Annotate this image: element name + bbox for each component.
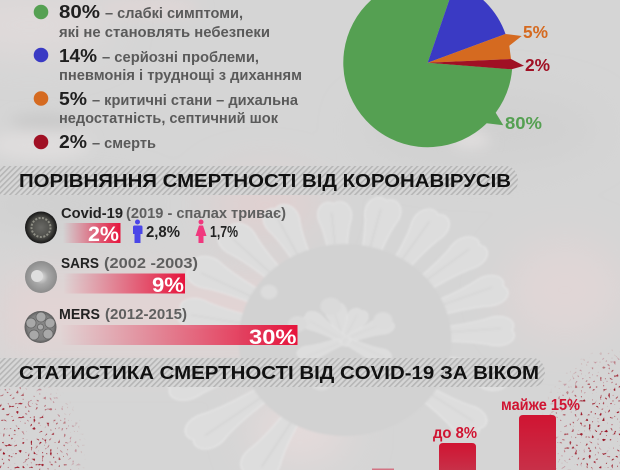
legend item 2%: 2% [59,132,87,152]
legend item 5%: 5% [59,89,87,109]
legend item 5% [34,89,299,127]
name: SARS [61,256,99,272]
legend item 80%: 80% [59,2,100,22]
blood spatter right [535,345,620,470]
legend [34,2,302,152]
bar 30% [60,325,298,349]
heading: age statistics [0,358,545,387]
bar: до 8% [433,425,477,470]
heading: comparison [0,166,518,195]
bar: майже 15%: майже 15% [501,397,580,414]
cropped top of third bar label [372,468,394,470]
slice: 80% [343,0,512,147]
legend item 2%: – смерть [92,136,156,152]
legend item 5%: – критичні стани – дихальна [92,93,299,109]
bar 9% [63,273,185,297]
icon: covid micrograph [25,212,57,244]
row: MERS [24,307,298,349]
slice: 5% [428,34,522,63]
period: (2012-2015) [105,307,187,323]
icon: female [196,220,206,243]
legend item 80% [34,2,270,41]
male rate: 2,8% [146,224,180,241]
virus illustration [162,195,515,470]
legend item 80%: які не становлять небезпеки [59,25,270,41]
row: Covid-19 [25,206,286,246]
legend item 80%: – слабкі симптоми, [105,6,243,22]
label 2%: 2% [525,55,550,75]
legend item 14%: – серйозні проблеми, [102,50,259,66]
bar: до 8%: до 8% [433,425,477,442]
heading: age statistics: СТАТИСТИКА СМЕРТНОСТІ ВІД COVID-19 ЗА ВІКОМ [19,362,539,383]
age bar chart [372,397,580,470]
label 5%: 5% [523,22,548,42]
label 80%: 80% [505,113,542,133]
bar 30%: 30% [249,325,296,349]
bar 2%: 2% [88,222,119,246]
icon: sars micrograph [25,261,57,293]
bar 2% [63,222,120,246]
pie chart [343,0,550,147]
bar: майже 15% [501,397,580,470]
row: SARS [25,256,198,297]
period: (2002 -2003) [104,256,198,272]
bar 9%: 9% [152,273,184,297]
female rate: 1,7% [210,224,238,241]
slice: 2% [428,59,524,69]
slice: 14% [428,0,506,63]
legend item 14% [34,46,302,84]
blood spatter left [0,385,90,470]
icon: male [133,220,142,243]
name: Covid-19 [61,206,123,222]
legend item 14%: пневмонія і труднощі з диханням [59,68,302,84]
legend item 5%: недостатність, септичний шок [59,111,279,127]
legend item 14%: 14% [59,46,97,66]
icon: mers micrograph [24,311,56,343]
legend item 2% [34,132,156,152]
period: (2019 - спалах триває) [126,206,286,222]
heading: comparison: ПОРІВНЯННЯ СМЕРТНОСТІ ВІД КОРОНАВІРУСІВ [19,170,511,191]
name: MERS [59,307,100,323]
